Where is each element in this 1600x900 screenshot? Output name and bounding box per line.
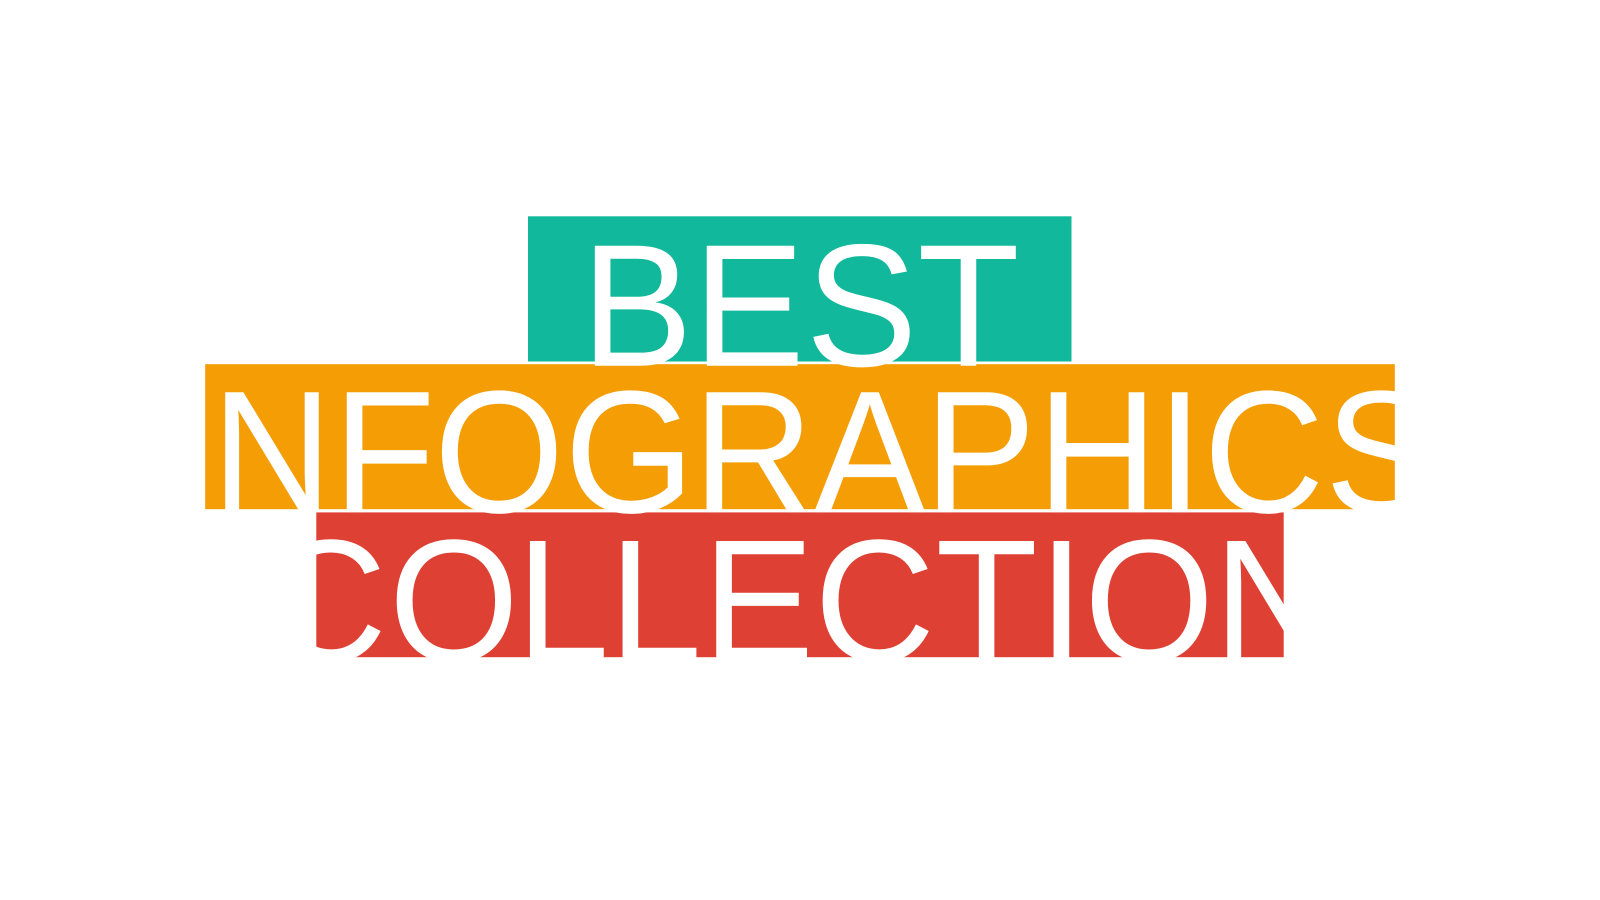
panel: green band: [528, 216, 1072, 362]
panel: orange band: [205, 364, 1395, 509]
panel: red band: [316, 512, 1284, 657]
heading: BEST: BEST: [581, 209, 1020, 403]
heading: COLLECTION: COLLECTION: [266, 504, 1334, 699]
heading: INFOGRAPHICS: INFOGRAPHICS: [167, 355, 1437, 550]
